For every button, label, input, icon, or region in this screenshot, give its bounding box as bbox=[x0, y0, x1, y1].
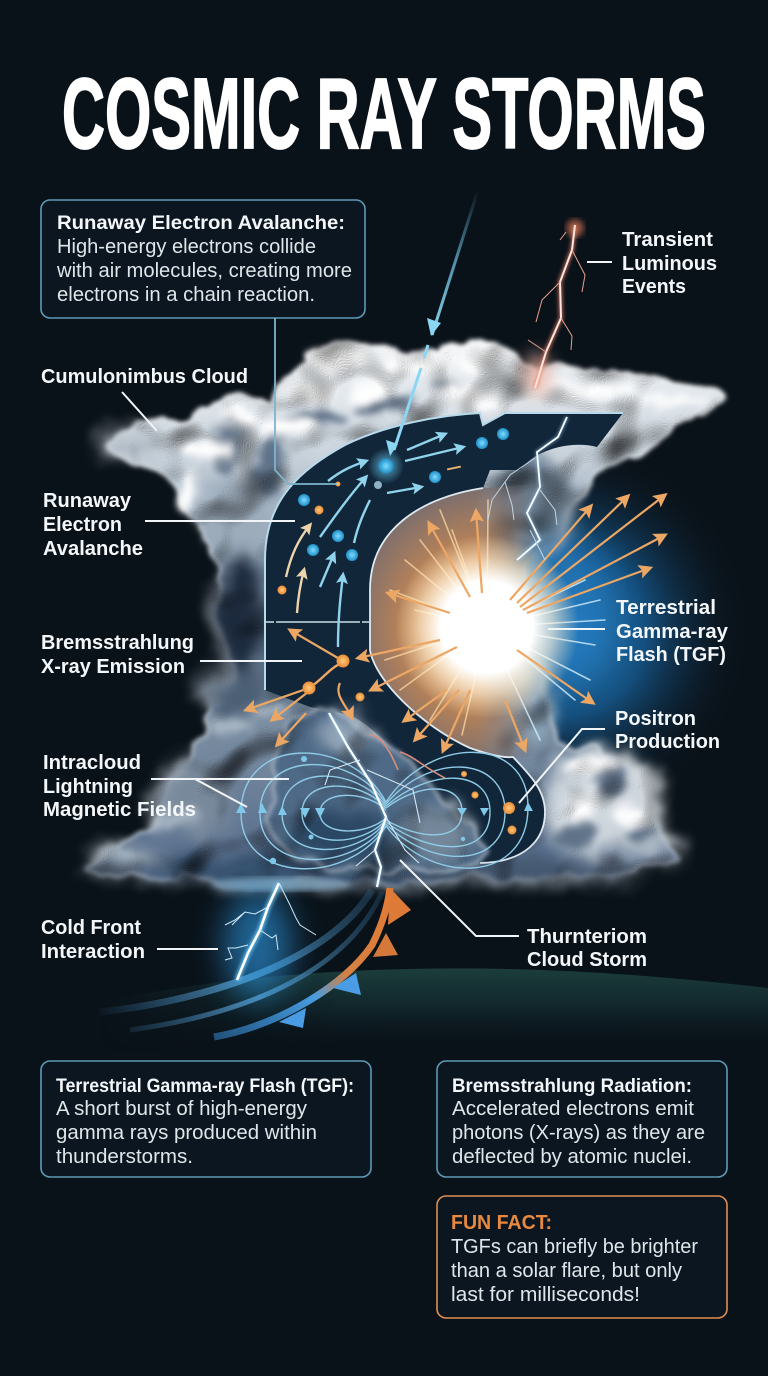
label: runaway electron avalanche: Runaway bbox=[43, 489, 132, 512]
callout: terrestrial gamma-ray flash: gamma rays produced within bbox=[56, 1122, 317, 1144]
thin cloud base band bbox=[212, 877, 348, 891]
callout connector line bbox=[275, 318, 337, 484]
upper lightning bolt bbox=[488, 417, 567, 560]
label: cold front interaction: Interaction bbox=[41, 940, 145, 963]
label: positron production: Production bbox=[615, 730, 720, 753]
label: terrestrial gamma-ray flash: Gamma-ray bbox=[616, 620, 729, 643]
particles: electrons and positrons bbox=[278, 428, 509, 702]
panel: cutaway storm interior bbox=[265, 413, 623, 863]
blue glow behind flash bbox=[370, 440, 768, 820]
billows: shadows and highlights bbox=[94, 352, 710, 863]
label: bremsstrahlung x-ray emission bbox=[41, 631, 302, 678]
label: intracloud lightning magnetic fields: Intracloud bbox=[43, 751, 141, 774]
cold front arcs bbox=[100, 888, 411, 1037]
callout: terrestrial gamma-ray flash: A short burst of high-energy bbox=[56, 1098, 307, 1120]
callout: fun fact: last for milliseconds! bbox=[451, 1284, 640, 1306]
callout: fun fact: TGFs can briefly be brighter bbox=[451, 1236, 698, 1258]
main lightning bolt bbox=[325, 713, 445, 887]
label: intracloud lightning magnetic fields: Lightning bbox=[43, 775, 133, 798]
label: transient luminous events bbox=[587, 228, 717, 298]
label: thunderstorm cloud: Thurnteriom bbox=[527, 925, 647, 948]
cold front lightning bbox=[224, 883, 316, 1000]
magnetic field loops bbox=[236, 752, 533, 869]
callout: fun fact bbox=[437, 1196, 727, 1318]
label: terrestrial gamma-ray flash: Flash (TGF) bbox=[616, 643, 726, 666]
callout: bremsstrahlung radiation: Accelerated electrons emit bbox=[452, 1098, 694, 1120]
label: runaway electron avalanche: Avalanche bbox=[43, 537, 143, 560]
label: terrestrial gamma-ray flash bbox=[548, 596, 729, 666]
callout: bremsstrahlung radiation: photons (X-rays) as they are bbox=[452, 1122, 705, 1144]
electron avalanche arrows bbox=[286, 434, 463, 688]
label: thunderstorm cloud: Cloud Storm bbox=[527, 948, 647, 971]
gamma-ray flash core bbox=[395, 535, 579, 719]
label: positron production: Positron bbox=[615, 707, 696, 730]
label: intracloud lightning magnetic fields: Magnetic Fields bbox=[43, 798, 196, 821]
callout: terrestrial gamma-ray flash bbox=[41, 1061, 371, 1177]
label: thunderstorm cloud bbox=[400, 860, 647, 971]
positrons in right magnetic lobe bbox=[461, 771, 516, 834]
inner glow region bbox=[370, 486, 530, 757]
label: transient luminous events: Events bbox=[622, 275, 686, 298]
label: transient luminous events: Transient bbox=[622, 228, 713, 251]
label: bremsstrahlung x-ray emission: X-ray Emission bbox=[41, 655, 185, 678]
central cloud over lower panel bbox=[267, 707, 481, 870]
callout: runaway electron avalanche: High-energy electrons collide bbox=[57, 236, 316, 258]
callout: fun fact: than a solar flare, but only bbox=[451, 1260, 682, 1282]
label: cold front interaction bbox=[41, 916, 218, 963]
label: terrestrial gamma-ray flash: Terrestrial bbox=[616, 596, 716, 619]
label: cold front interaction: Cold Front bbox=[41, 916, 141, 939]
label: cumulonimbus cloud: Cumulonimbus Cloud bbox=[41, 365, 248, 388]
orange gamma arrows bbox=[246, 495, 665, 751]
label: bremsstrahlung x-ray emission: Bremsstrahlung bbox=[41, 631, 194, 654]
callout: runaway electron avalanche bbox=[41, 200, 365, 318]
callout: terrestrial gamma-ray flash: Terrestrial Gamma-ray Flash (TGF): bbox=[56, 1075, 354, 1097]
cumulonimbus cloud mass bbox=[80, 342, 732, 882]
callout: bremsstrahlung radiation: deflected by atomic nuclei. bbox=[452, 1146, 692, 1168]
callout: bremsstrahlung radiation bbox=[437, 1061, 727, 1177]
flash rays bbox=[385, 500, 605, 740]
blue flash glow over cloud bbox=[512, 542, 612, 682]
transient luminous event lightning bbox=[523, 219, 585, 397]
label: transient luminous events: Luminous bbox=[622, 252, 717, 275]
callout: runaway electron avalanche: electrons in a chain reaction. bbox=[57, 284, 315, 306]
callout: runaway electron avalanche: Runaway Electron Avalanche: bbox=[57, 212, 345, 234]
callout: runaway electron avalanche: with air molecules, creating more bbox=[56, 260, 352, 282]
ground horizon bbox=[172, 968, 768, 1024]
callout: terrestrial gamma-ray flash: thunderstorms. bbox=[56, 1146, 193, 1168]
label: runaway electron avalanche bbox=[43, 489, 295, 560]
cosmic ray beam bbox=[386, 190, 478, 456]
label: cumulonimbus cloud bbox=[41, 365, 248, 431]
callout: bremsstrahlung radiation: Bremsstrahlung Radiation: bbox=[452, 1075, 692, 1097]
callout: fun fact: FUN FACT: bbox=[451, 1212, 552, 1234]
label: runaway electron avalanche: Electron bbox=[43, 513, 122, 536]
label: intracloud lightning magnetic fields bbox=[43, 751, 289, 821]
label: positron production bbox=[519, 707, 720, 803]
